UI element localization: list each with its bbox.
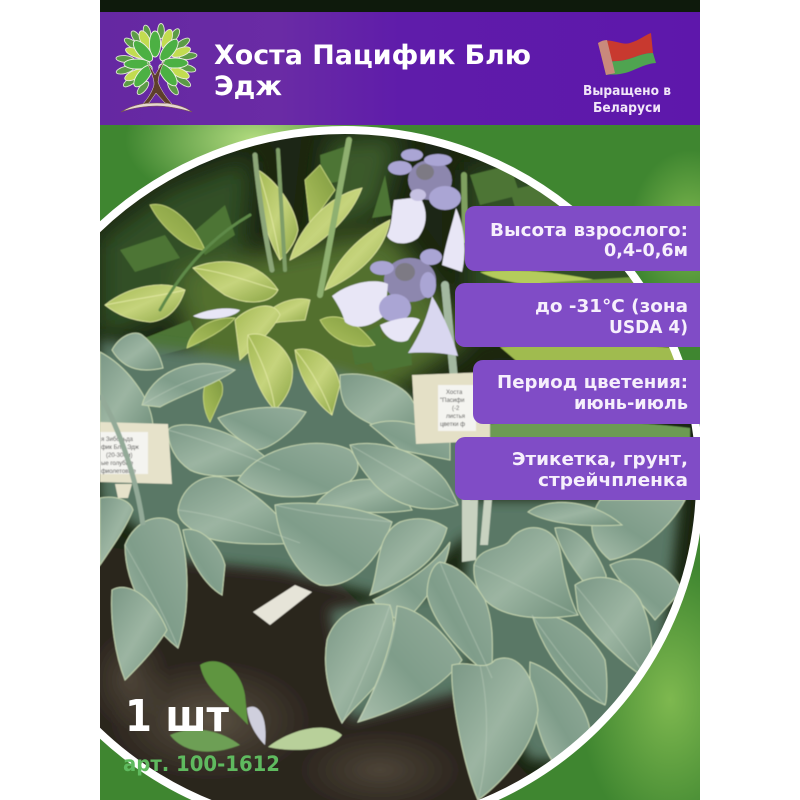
panel: hardiness: до -31°C (зона	[535, 296, 688, 317]
plant label right: "Пасифи	[440, 398, 464, 404]
plant label right	[412, 372, 490, 444]
title: Хоста Пацифик Блю	[214, 40, 531, 71]
Belarus flag icon	[598, 33, 656, 75]
panel: flowering period: июнь-июль	[574, 393, 688, 414]
panel: package contents	[455, 437, 710, 500]
small background leaves	[120, 145, 560, 372]
plant label left: я Зибольда	[101, 437, 134, 443]
infographic	[100, 0, 700, 800]
mid-green foliage masses	[100, 134, 630, 394]
article number: арт. 100-1612	[123, 752, 280, 776]
blue leaf mass underlay	[100, 340, 680, 760]
seedling	[170, 661, 342, 752]
panel: height	[465, 206, 710, 271]
panel: height: Высота взрослого:	[490, 220, 688, 241]
blurred green background	[100, 0, 700, 800]
white stems at centre	[462, 500, 492, 562]
panel: flowering period: Период цветения:	[497, 372, 688, 393]
header band	[100, 12, 700, 125]
stem over left label	[100, 395, 143, 525]
grown in Belarus caption: Беларуси	[593, 101, 661, 116]
plant label left: фик Блю Эдж	[101, 445, 139, 451]
plant label right: Хоста	[446, 390, 463, 396]
grown in Belarus caption: Выращено в	[583, 84, 671, 99]
yellow hosta leaves	[105, 165, 390, 422]
dark foliage backdrop	[100, 134, 696, 776]
grown in Belarus caption	[583, 84, 671, 116]
plant label left: (20-30см)	[106, 453, 132, 459]
blue-green hosta leaves	[100, 333, 685, 800]
title	[214, 44, 530, 99]
panel: flowering period	[473, 360, 710, 424]
plant label left: ые голубые	[101, 461, 134, 467]
title: Эдж	[214, 71, 282, 102]
paper scrap on soil	[253, 585, 312, 625]
quantity label: 1 шт	[125, 691, 229, 742]
plant label right: цветки ф	[440, 422, 465, 428]
plant label right: (-2	[452, 406, 460, 412]
plant label left: фиолетовые	[101, 469, 137, 475]
panel: hardiness	[455, 283, 710, 347]
flower stems and grass blades	[160, 140, 470, 540]
panel: package contents: стрейчпленка	[538, 470, 688, 491]
panel: height: 0,4-0,6м	[604, 240, 688, 261]
logo: tree	[115, 24, 197, 112]
panel: hardiness: USDA 4)	[609, 317, 688, 338]
plant photo area	[100, 134, 696, 800]
bright leaves at right	[480, 270, 690, 445]
white oval ring	[100, 126, 700, 800]
plant label left	[100, 422, 172, 498]
panel: package contents: Этикетка, грунт,	[512, 449, 688, 470]
soil	[100, 548, 528, 800]
plant label right: листья	[446, 414, 465, 420]
hosta flowers	[193, 149, 464, 356]
